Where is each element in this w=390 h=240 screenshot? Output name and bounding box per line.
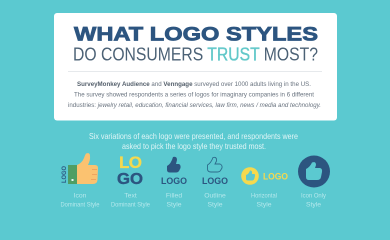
logo: icon dominant [61,153,98,184]
intro text: industries: jewelry retail, education, financial services, law firm, news / media and technology. [68,102,321,109]
panel: intro card [54,13,337,120]
logo: outline [202,157,228,186]
logo: text dominant [117,153,143,188]
logo: outline: LOGO [202,176,228,186]
logo: text dominant: GO [117,171,143,188]
intro text [68,81,321,109]
intro text: SurveyMonkey Audience and Venngage surveyed over 1000 adults living in the US. [77,81,311,88]
description text: Six variations of each logo were presented, and respondents were [89,131,298,141]
captions: Horizontal [251,192,277,200]
captions: Text [124,192,137,200]
captions: Dominant Style [60,202,100,208]
description text [89,131,298,151]
title line 2: DO CONSUMERS TRUST MOST? [73,44,318,64]
description text: asked to pick the logo style they trusted most. [122,141,266,151]
logo: filled [161,157,187,186]
captions: Icon [74,192,87,200]
captions [60,192,327,208]
intro text: The survey showed respondents a series of logos for imaginary companies in 6 different [74,92,314,98]
captions: Style [166,202,182,208]
logo: horizontal: LOGO [263,172,288,182]
captions: Dominant Style [111,202,150,208]
title line 1: WHAT LOGO STYLES [74,23,318,45]
logo: icon dominant: LOGO [61,166,68,183]
captions: Style [207,202,223,208]
logo: horizontal [241,167,288,185]
logo: icon only [298,156,330,188]
captions: Style [256,202,272,208]
captions: Filled [166,192,182,200]
captions: Style [306,202,321,208]
logo: filled: LOGO [161,176,187,186]
captions: Icon Only [301,192,327,200]
captions: Outline [204,192,226,200]
logo: text dominant: LO [119,153,142,172]
